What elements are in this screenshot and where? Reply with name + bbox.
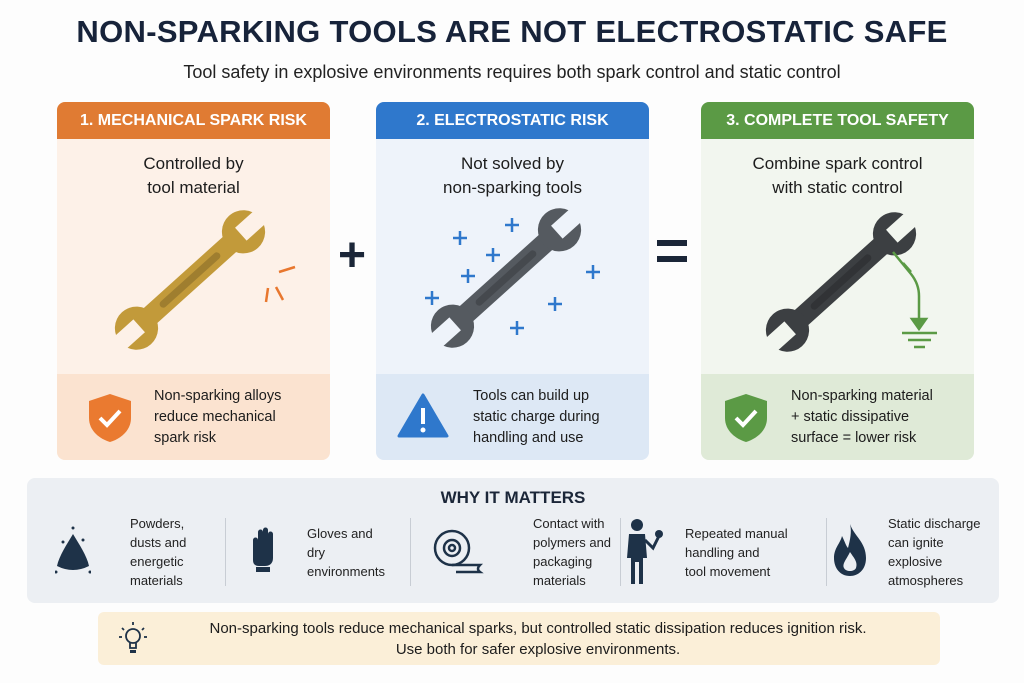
callout bbox=[376, 374, 649, 460]
callout: surface = lower risk bbox=[791, 430, 916, 446]
text: powders: Powders, bbox=[130, 516, 184, 531]
lead text: with static control bbox=[772, 178, 903, 197]
text: polymers: Contact with bbox=[533, 516, 605, 531]
text: gloves: environments bbox=[307, 564, 385, 579]
callout bbox=[701, 374, 974, 460]
text: powders: energetic bbox=[130, 554, 183, 569]
callout: Tools can build up bbox=[473, 388, 589, 404]
heading bbox=[701, 102, 974, 139]
text: static discharge bbox=[888, 516, 980, 588]
text: gloves: dry bbox=[307, 545, 325, 560]
heading: WHY IT MATTERS bbox=[441, 488, 585, 507]
panel: why it matters bbox=[27, 478, 999, 603]
text: handling bbox=[685, 526, 788, 579]
icon: warning bbox=[398, 393, 449, 438]
heading bbox=[376, 102, 649, 139]
text: gloves: Gloves and bbox=[307, 526, 373, 541]
text: polymers: packaging bbox=[533, 554, 592, 569]
icon: plus: + bbox=[338, 229, 366, 282]
icon: tape bbox=[434, 530, 484, 574]
lead text: Not solved by bbox=[461, 154, 564, 173]
icon: glove bbox=[253, 528, 273, 572]
heading bbox=[57, 102, 330, 139]
text: polymers: materials bbox=[533, 573, 586, 588]
text: static discharge: Static discharge bbox=[888, 516, 980, 531]
text: powders: dusts and bbox=[130, 535, 186, 550]
lead text: non-sparking tools bbox=[443, 178, 582, 197]
panel: mechanical spark risk bbox=[57, 102, 330, 460]
text: static discharge: can ignite bbox=[888, 535, 944, 550]
callout: reduce mechanical bbox=[154, 409, 276, 425]
callout: key takeaway: Non-sparking tools reduce mechanical sparks, but controlled static dissipation reduces ignition risk. bbox=[210, 620, 866, 637]
callout: Non-sparking alloys bbox=[154, 388, 281, 404]
icon: bronze wrench bbox=[114, 210, 296, 350]
text: powders bbox=[130, 516, 186, 588]
callout: handling and use bbox=[473, 430, 583, 446]
icon: equals bbox=[657, 240, 687, 262]
text: handling: handling and bbox=[685, 545, 759, 560]
lead text bbox=[143, 154, 244, 197]
icon: flame bbox=[834, 524, 866, 576]
heading: 2. ELECTROSTATIC RISK bbox=[416, 112, 609, 129]
lead text: Combine spark control bbox=[752, 154, 923, 173]
text: polymers bbox=[533, 516, 611, 588]
heading: 1. MECHANICAL SPARK RISK bbox=[80, 112, 307, 129]
callout: Non-sparking material bbox=[791, 388, 933, 404]
text: static discharge: explosive bbox=[888, 554, 942, 569]
icon: powder bbox=[55, 526, 91, 574]
callout: spark risk bbox=[154, 430, 216, 446]
panel: complete tool safety bbox=[701, 102, 974, 460]
callout: static charge during bbox=[473, 409, 600, 425]
icon: grounded wrench bbox=[766, 212, 937, 352]
subtitle: Tool safety in explosive environments requires both spark control and static control bbox=[183, 62, 841, 82]
lead text bbox=[443, 154, 582, 197]
text: static discharge: atmospheres bbox=[888, 573, 963, 588]
callout bbox=[57, 374, 330, 460]
icon: shield bbox=[89, 394, 131, 442]
callout: key takeaway bbox=[98, 612, 940, 665]
text: handling: tool movement bbox=[685, 564, 770, 579]
panel: electrostatic risk bbox=[376, 102, 649, 460]
callout: key takeaway: Use both for safer explosive environments. bbox=[396, 641, 680, 658]
text: gloves bbox=[307, 526, 385, 579]
text: powders: materials bbox=[130, 573, 183, 588]
callout: + static dissipative bbox=[791, 409, 909, 425]
lead text bbox=[752, 154, 923, 197]
text: polymers: polymers and bbox=[533, 535, 611, 550]
heading: 3. COMPLETE TOOL SAFETY bbox=[726, 112, 949, 129]
text: handling: Repeated manual bbox=[685, 526, 788, 541]
title: NON-SPARKING TOOLS ARE NOT ELECTROSTATIC SAFE bbox=[76, 14, 948, 49]
icon: worker bbox=[627, 519, 663, 584]
lead text: Controlled by bbox=[143, 154, 244, 173]
lead text: tool material bbox=[147, 178, 240, 197]
icon: charged wrench bbox=[425, 208, 600, 348]
icon: shield bbox=[725, 394, 767, 442]
icon: lightbulb bbox=[119, 622, 147, 653]
